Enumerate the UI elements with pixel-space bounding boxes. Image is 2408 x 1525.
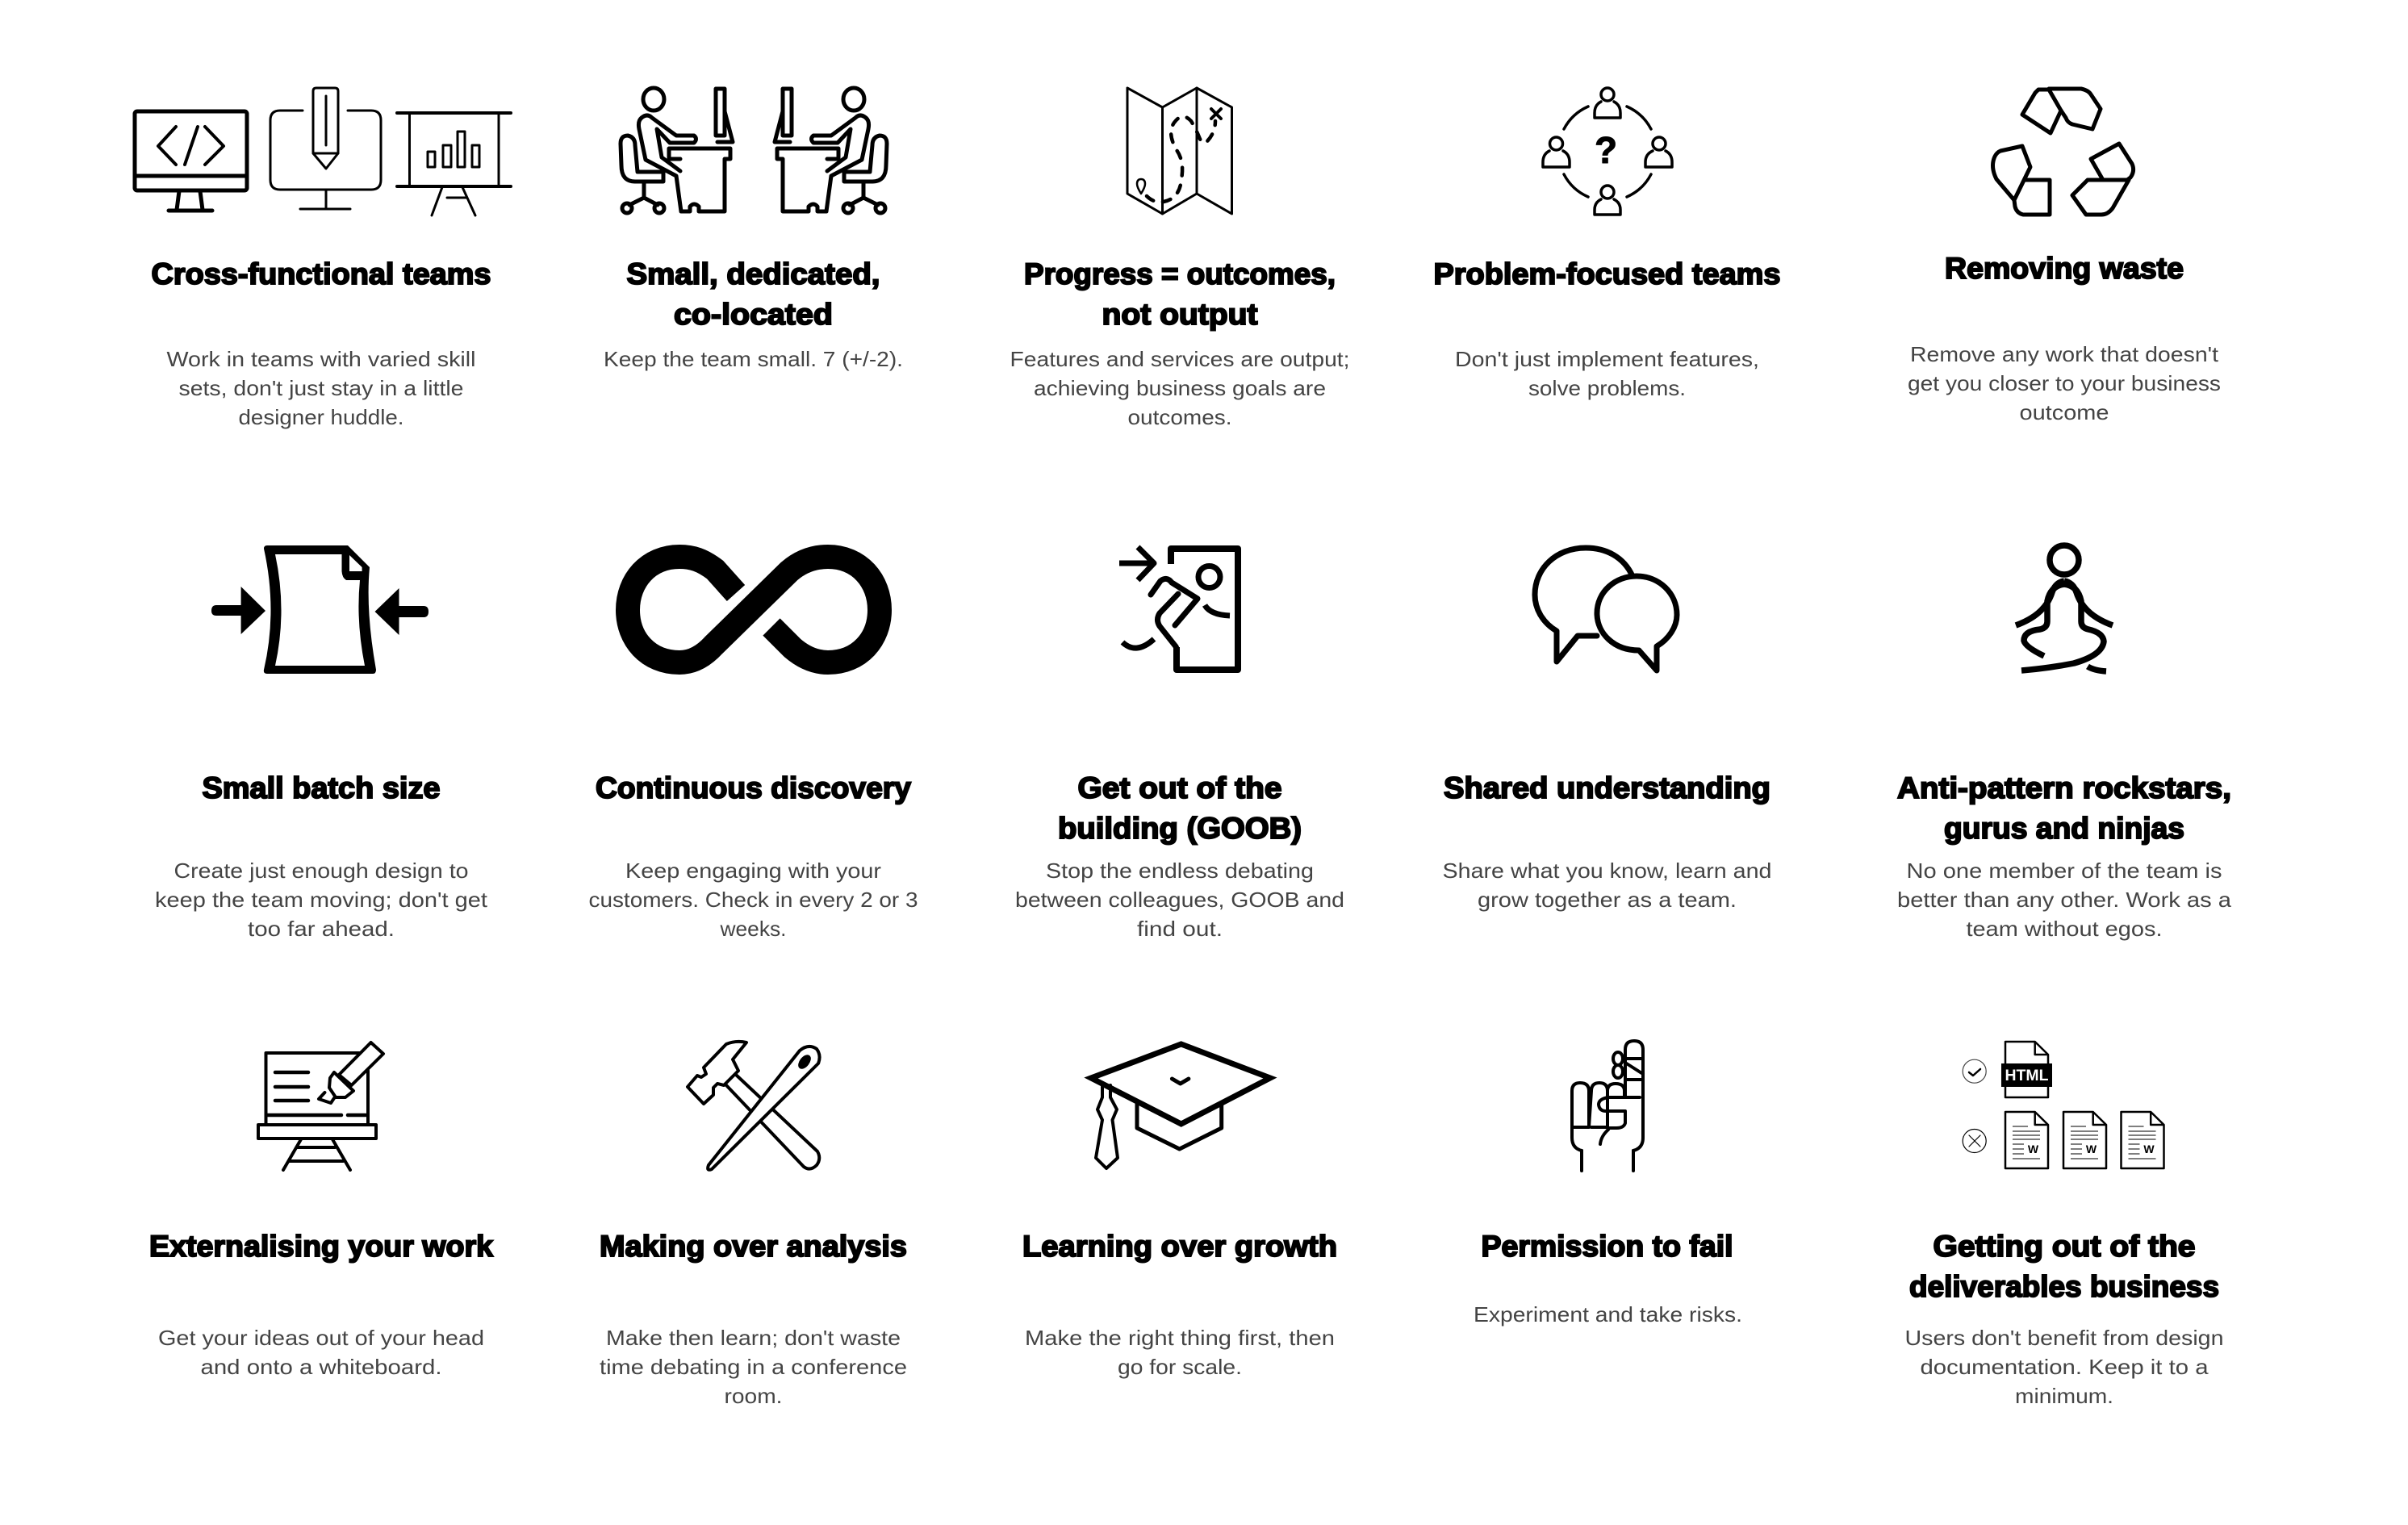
- text block: Users don't benefit from design: [1904, 1326, 2224, 1350]
- icon: Word file 1: [2005, 1112, 2048, 1168]
- panel: Removing waste: [1908, 89, 2221, 424]
- text block: and onto a whiteboard.: [200, 1355, 442, 1379]
- heading: deliverables business: [1909, 1270, 2219, 1303]
- heading: Permission to fail: [1482, 1230, 1733, 1263]
- icon: HTML file: [2001, 1042, 2052, 1097]
- text block: room.: [725, 1384, 783, 1408]
- icon: person leaving through a door: [1119, 547, 1238, 670]
- text block: Keep engaging with your: [625, 859, 881, 883]
- text block: Work in teams with varied skill: [166, 347, 476, 371]
- icon: Word file 2: W: [2086, 1143, 2097, 1155]
- heading: Problem-focused teams: [1433, 257, 1780, 290]
- text block: Make the right thing first, then: [1025, 1326, 1335, 1350]
- heading: Externalising your work: [149, 1230, 493, 1263]
- icon: two people at desks: [621, 88, 887, 213]
- text block: too far ahead.: [248, 917, 395, 941]
- text block: designer huddle.: [239, 405, 403, 429]
- panel: Small, dedicated, co-located: [604, 88, 903, 371]
- text block: solve problems.: [1528, 376, 1686, 400]
- text block: achieving business goals are: [1034, 376, 1326, 400]
- text block: [1904, 1326, 2224, 1408]
- text block: outcomes.: [1128, 405, 1231, 429]
- panel: Permission to fail: [1474, 1041, 1742, 1327]
- text block: [589, 859, 918, 941]
- heading: Removing waste: [1945, 252, 2184, 285]
- icon: Word file 1: W: [2028, 1143, 2039, 1155]
- icon: recycling arrows: [1993, 89, 2134, 215]
- icon: check circle: [1963, 1059, 1986, 1083]
- text block: Don't just implement features,: [1455, 347, 1759, 371]
- text block: outcome: [2019, 400, 2109, 424]
- icon: Word file 3: [2121, 1112, 2164, 1168]
- panel: Small batch size: [155, 545, 488, 941]
- panel: Externalising your work: [149, 1042, 493, 1379]
- heading: Shared understanding: [1444, 771, 1770, 804]
- heading: building (GOOB): [1058, 812, 1302, 845]
- text block: [1443, 859, 1772, 912]
- icon: monitor, tablet and presentation board: [135, 88, 511, 215]
- panel: Getting out of the deliverables business: [1904, 1042, 2224, 1408]
- panel: Progress = outcomes, not output: [1010, 88, 1349, 429]
- icon: hammer and needle: [688, 1042, 820, 1170]
- panel: Shared understanding: [1443, 548, 1772, 912]
- heading: Anti-pattern rockstars,: [1897, 771, 2231, 804]
- text block: [1455, 347, 1759, 400]
- text block: keep the team moving; don't get: [155, 888, 488, 912]
- text block: Keep the team small. 7 (+/-2).: [604, 347, 903, 371]
- panel: Get out of the building (GOOB): [1015, 547, 1344, 941]
- text block: minimum.: [2015, 1384, 2113, 1408]
- heading: Small, dedicated,: [626, 257, 880, 290]
- text block: No one member of the team is: [1906, 859, 2222, 883]
- text block: [155, 859, 488, 941]
- text block: sets, don't just stay in a little: [179, 376, 463, 400]
- heading: co-located: [674, 298, 833, 331]
- text block: Make then learn; don't waste: [606, 1326, 901, 1350]
- text block: go for scale.: [1118, 1355, 1242, 1379]
- text block: [1908, 342, 2221, 424]
- icon: meditating figure: [2016, 545, 2113, 671]
- icon: Word file 3: W: [2143, 1143, 2155, 1155]
- panel: Problem-focused teams: [1433, 88, 1780, 400]
- heading: [626, 257, 880, 331]
- icon: tick over HTML file and cross over Word files: [1963, 1042, 2164, 1168]
- heading: [1058, 771, 1302, 845]
- text block: time debating in a conference: [600, 1355, 907, 1379]
- panel: Making over analysis: [600, 1042, 907, 1408]
- text block: [600, 1326, 907, 1408]
- heading: Progress = outcomes,: [1024, 257, 1336, 290]
- heading: Cross-functional teams: [152, 257, 491, 290]
- text block: better than any other. Work as a: [1897, 888, 2232, 912]
- icon: infinity loop: [628, 557, 880, 662]
- icon: folded map with route: [1127, 88, 1231, 214]
- heading: not output: [1102, 298, 1257, 331]
- icon: cross circle: [1963, 1130, 1986, 1152]
- icon: HTML file: HTML: [2005, 1068, 2049, 1084]
- text block: Experiment and take risks.: [1474, 1302, 1742, 1327]
- text block: between colleagues, GOOB and: [1015, 888, 1344, 912]
- heading: Small batch size: [202, 771, 441, 804]
- icon: four people around a question mark: ?: [1595, 129, 1617, 171]
- text block: [1010, 347, 1349, 429]
- text block: grow together as a team.: [1478, 888, 1737, 912]
- panel: Cross-functional teams: [135, 88, 511, 429]
- text block: Create just enough design to: [174, 859, 468, 883]
- text block: get you closer to your business: [1908, 371, 2221, 395]
- icon: whiteboard with marker: [258, 1042, 383, 1170]
- icon: compressed document with arrows: [211, 545, 429, 674]
- heading: Continuous discovery: [596, 771, 911, 804]
- text block: Get your ideas out of your head: [158, 1326, 484, 1350]
- text block: [1897, 859, 2232, 941]
- panel: Anti-pattern rockstars, gurus and ninjas: [1897, 545, 2232, 941]
- panel: Continuous discovery: [589, 557, 918, 941]
- text block: team without egos.: [1966, 917, 2163, 941]
- text block: [1015, 859, 1344, 941]
- text block: documentation. Keep it to a: [1921, 1355, 2209, 1379]
- text block: Share what you know, learn and: [1443, 859, 1772, 883]
- heading: [1024, 257, 1336, 331]
- heading: [1909, 1230, 2219, 1303]
- text block: [166, 347, 476, 429]
- heading: Get out of the: [1078, 771, 1281, 804]
- icon: graduation cap: [1091, 1044, 1270, 1168]
- icon: four people around a question mark: [1543, 88, 1672, 215]
- text block: Features and services are output;: [1010, 347, 1349, 371]
- heading: gurus and ninjas: [1944, 812, 2184, 845]
- text block: Remove any work that doesn't: [1910, 342, 2219, 366]
- text block: [158, 1326, 484, 1379]
- heading: Getting out of the: [1934, 1230, 2195, 1263]
- text block: [1025, 1326, 1335, 1379]
- text block: find out.: [1137, 917, 1223, 941]
- text block: weeks.: [719, 917, 786, 941]
- icon: two speech bubbles: [1535, 548, 1677, 671]
- panel: Learning over growth: [1022, 1044, 1337, 1379]
- icon: left person: [621, 88, 733, 213]
- heading: Learning over growth: [1022, 1230, 1337, 1263]
- heading: Making over analysis: [600, 1230, 907, 1263]
- icon: Word file 2: [2063, 1112, 2106, 1168]
- text block: customers. Check in every 2 or 3: [589, 888, 918, 912]
- text block: Stop the endless debating: [1046, 859, 1314, 883]
- icon: hand with ribbon on finger: [1572, 1041, 1643, 1171]
- icon: right person: [775, 88, 887, 213]
- heading: [1897, 771, 2231, 845]
